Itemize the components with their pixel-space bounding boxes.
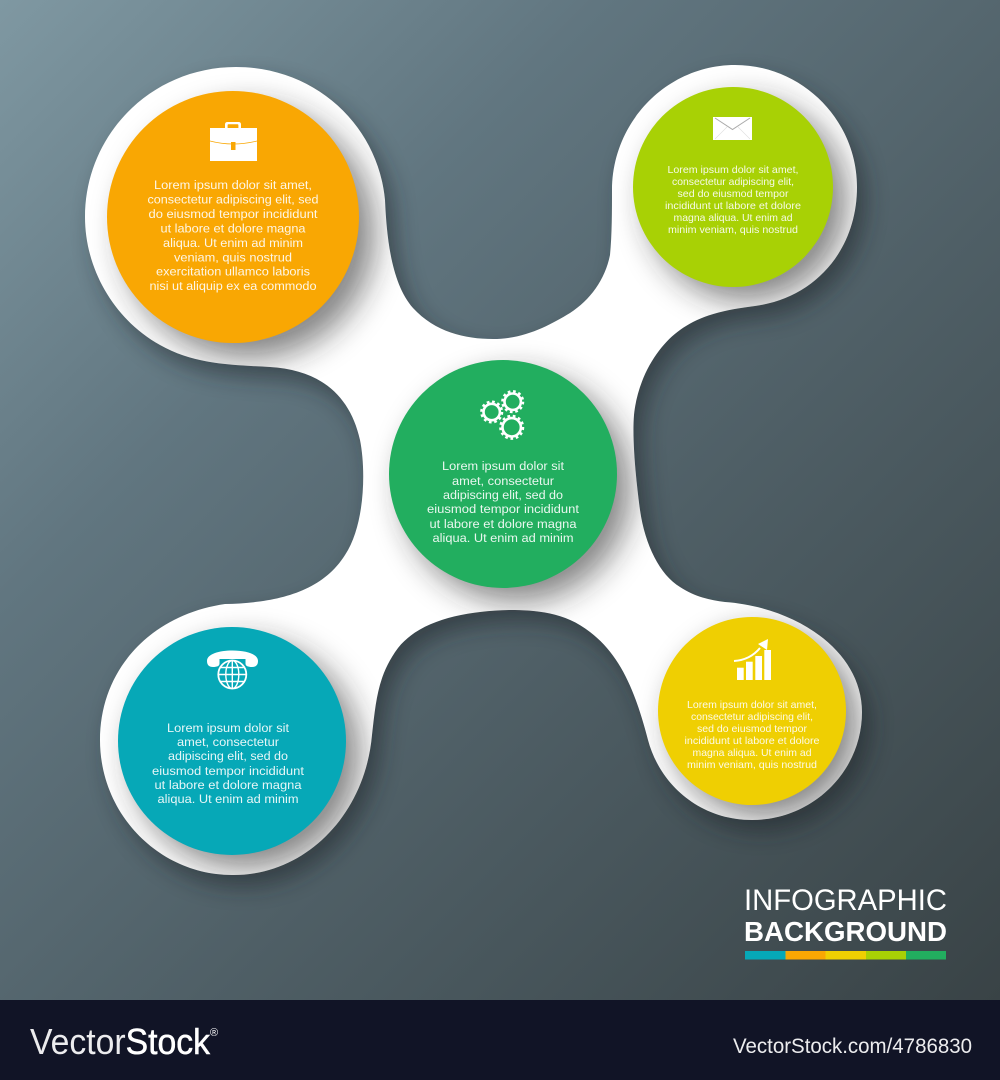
text: lime: incididunt ut labore et dolore [665,200,801,212]
text: green: eiusmod tempor incididunt [427,502,580,516]
text: orange: veniam, quis nostrud [174,250,292,264]
colour bar [745,951,946,960]
text: orange: exercitation ullamco laboris [156,265,310,279]
text: green: adipiscing elit, sed do [443,488,563,502]
text: lime [665,164,801,236]
text: orange: aliqua. Ut enim ad minim [163,236,303,250]
panel: teal circle [118,627,346,855]
text: teal: Lorem ipsum dolor sit [167,721,290,735]
text: lime: sed do eiusmod tempor [678,188,789,200]
title block [744,884,947,947]
icon: phone globe [207,650,258,688]
panel: green circle [389,360,617,588]
text: yellow: consectetur adipiscing elit, [691,711,813,723]
text: lime: consectetur adipiscing elit, [672,176,794,188]
text: lime: Lorem ipsum dolor sit amet, [668,164,798,176]
text: lime: minim veniam, quis nostrud [668,224,798,236]
text: yellow: minim veniam, quis nostrud [687,759,817,771]
text: green: Lorem ipsum dolor sit [442,459,565,473]
text: yellow: Lorem ipsum dolor sit amet, [687,699,817,711]
icon: envelope [713,117,752,140]
text: yellow: incididunt ut labore et dolore [684,735,820,747]
text: teal: aliqua. Ut enim ad minim [158,792,298,806]
text: yellow: magna aliqua. Ut enim ad [692,747,812,759]
text: orange: ut labore et dolore magna [160,221,306,235]
text: orange [148,178,318,293]
text: teal: amet, consectetur [177,735,279,749]
footer logo: VectorStock [30,1021,211,1062]
icon: growth chart [734,639,771,680]
title block: INFOGRAPHIC [744,884,947,917]
panel: orange circle [107,91,359,343]
text: yellow [684,699,820,771]
text: orange: do eiusmod tempor incididunt [148,207,318,221]
text: orange: consectetur adipiscing elit, sed [148,192,318,206]
text: teal: eiusmod tempor incididunt [152,764,305,778]
white metaball panel [85,65,862,875]
panel: lime circle [633,87,833,287]
icon: gears [481,391,523,439]
text: lime: magna aliqua. Ut enim ad [674,212,793,224]
text: green: ut labore et dolore magna [430,517,577,531]
text: teal: adipiscing elit, sed do [168,749,288,763]
icon: briefcase [210,122,257,161]
text: green: aliqua. Ut enim ad minim [432,531,574,545]
text: green [427,459,580,545]
panel: yellow circle [658,617,846,805]
text: teal: ut labore et dolore magna [154,778,302,792]
footer id: VectorStock.com/4786830 [733,1035,972,1058]
registered mark: ® [210,1027,218,1039]
text: yellow: sed do eiusmod tempor [697,723,807,735]
text: green: amet, consectetur [452,474,554,488]
blob shadow [94,77,871,887]
text: orange: Lorem ipsum dolor sit amet, [154,178,312,192]
text: orange: nisi ut aliquip ex ea commodo [150,279,317,293]
title block: BACKGROUND [744,916,947,947]
text: teal [152,721,305,806]
footer bar [0,1000,1000,1080]
